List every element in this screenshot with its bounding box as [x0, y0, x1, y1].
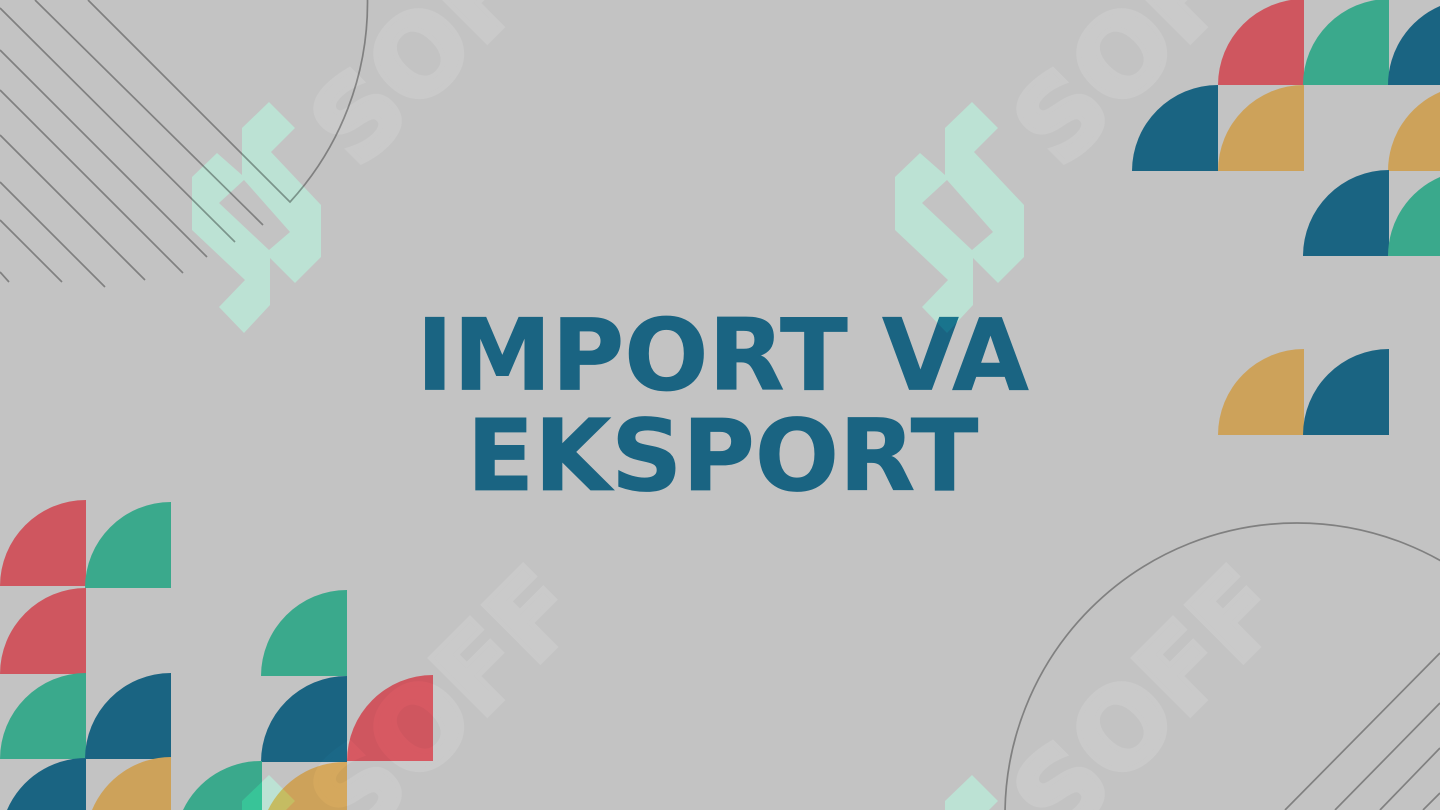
line art: top-left circle and diagonal lines: [0, 0, 368, 287]
line art: bottom-right circle and diagonal lines: [1005, 523, 1440, 810]
decoration: bottom-left quarter-circle tiles: [0, 500, 433, 810]
title: [416, 298, 1029, 514]
title: EKSPORT: [467, 399, 978, 514]
watermark: logo top-right: [895, 102, 1024, 333]
watermark: logo bottom-left: [192, 775, 321, 810]
watermark: logo bottom-right: [895, 775, 1024, 810]
decoration: top-right quarter-circle tiles: [1132, 0, 1440, 256]
title: IMPORT VA: [416, 298, 1029, 414]
watermark: logo top-left: [192, 102, 321, 333]
decoration: right-middle quarter-circle pair: [1218, 349, 1389, 435]
